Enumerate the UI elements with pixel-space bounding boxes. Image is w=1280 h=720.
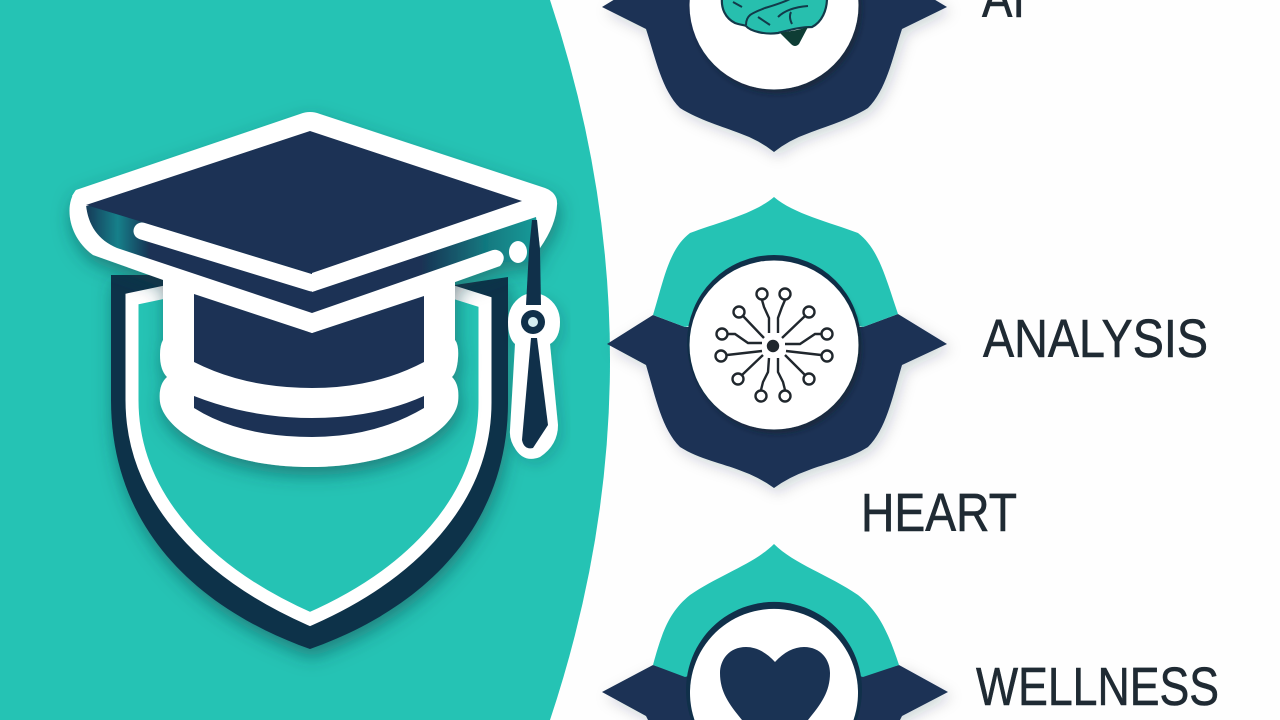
label: WELLNESS: WELLNESS (976, 657, 1219, 717)
icon: circuit network (716, 288, 832, 402)
badge: white circle (690, 0, 858, 90)
badge: dark ring (686, 602, 862, 720)
badge: navy shape (602, 665, 948, 720)
cap: white crown body (160, 270, 458, 467)
badge: navy shape (607, 314, 947, 488)
panel: AI badge (602, 0, 947, 152)
tassel: white outline (508, 293, 560, 459)
panel: Wellness badge (602, 544, 948, 720)
cap: white left and lower strip (69, 190, 504, 333)
label: HEART: HEART (861, 483, 1017, 543)
tassel: navy ring (521, 310, 545, 334)
shield: white inner outline (132, 291, 485, 619)
badge: white circle (690, 260, 858, 430)
tassel: cord (526, 220, 541, 305)
cap: navy crown band (194, 396, 424, 437)
cap: white inner strip (142, 231, 312, 283)
badge: teal top (653, 544, 899, 677)
badge: white circle (690, 609, 858, 720)
cap: white dot (509, 241, 527, 263)
cap: white top outline (72, 112, 557, 292)
panel: Analysis badge (607, 197, 947, 488)
label: ANALYSIS: ANALYSIS (983, 309, 1208, 369)
cap: navy board top (86, 131, 522, 273)
tassel: ring centre (528, 317, 538, 327)
badge: dark ring (687, 255, 861, 429)
icon: heart (720, 647, 830, 720)
tassel: navy fringe (522, 338, 548, 448)
panel: teal curved left panel (0, 0, 610, 720)
cap: navy crown front (194, 294, 424, 388)
icon: graduation cap on shield (69, 112, 560, 649)
cap: underside gradient region (86, 200, 537, 318)
badge: teal top (653, 197, 898, 327)
brain stem (780, 27, 808, 46)
cap: whole cap with shadow (69, 112, 557, 467)
badge: navy shape (602, 0, 947, 152)
icon: brain (722, 0, 827, 46)
shield: dark outer (111, 275, 508, 649)
